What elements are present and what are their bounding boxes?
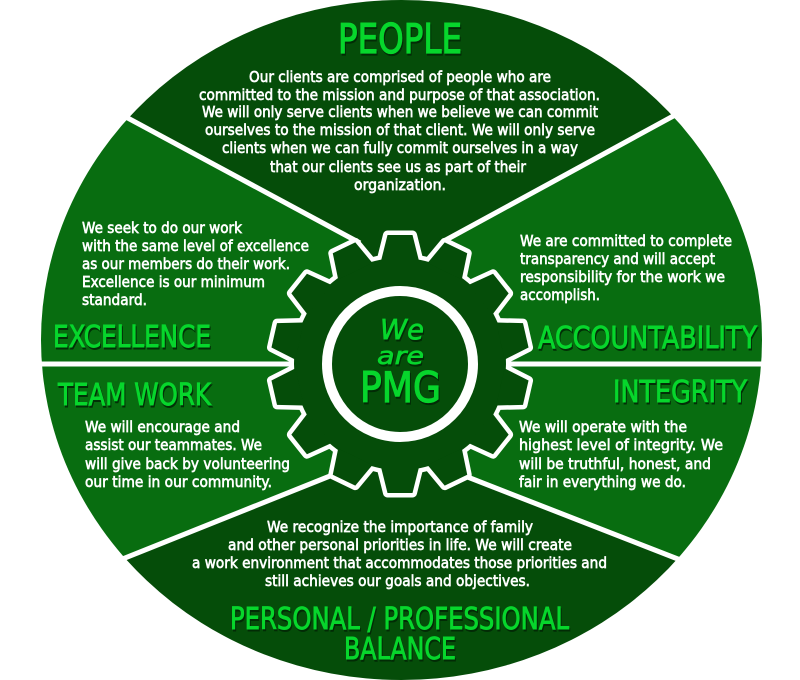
heading: people: PEOPLE: [338, 15, 462, 63]
text: balance: and other personal priorities in life. We will create: [228, 536, 572, 554]
text: people: clients when we can fully commit ourselves in a way: [222, 139, 578, 157]
heading: personal professional balance: [230, 602, 569, 667]
text: people: committed to the mission and purpose of that association.: [199, 86, 600, 104]
heading: team work: TEAM WORK: [57, 378, 212, 413]
text: integrity: fair in everything we do.: [519, 473, 686, 491]
text: integrity: will be truthful, honest, and: [519, 455, 711, 473]
text: team work: will give back by volunteering: [85, 455, 290, 473]
text: accountability: transparency and will accept: [520, 250, 715, 268]
text: people: Our clients are comprised of people who are: [249, 68, 551, 86]
text: excellence: [82, 219, 309, 309]
center label: We are PMG: PMG: [360, 363, 441, 412]
text: team work: We will encourage and: [85, 418, 240, 436]
text: integrity: We will operate with the: [519, 418, 687, 436]
text: people: that our clients see us as part of their: [270, 158, 527, 176]
heading: personal professional balance: BALANCE: [344, 632, 456, 667]
panel: personal professional balance: [126, 471, 676, 680]
text: excellence: Excellence is our minimum: [82, 273, 265, 291]
panel: people: [130, 0, 671, 257]
text: excellence: as our members do their work.: [82, 255, 290, 273]
text: team work: [85, 418, 290, 491]
heading: personal professional balance: PERSONAL / PROFESSIONAL: [230, 602, 569, 637]
text: team work: assist our teammates. We: [85, 436, 262, 454]
text: balance: We recognize the importance of family: [267, 518, 533, 536]
panel: integrity: [467, 366, 761, 557]
heading: excellence: EXCELLENCE: [53, 320, 211, 355]
heading: integrity: INTEGRITY: [613, 375, 748, 410]
icon: gear: [270, 235, 530, 493]
text: integrity: [519, 418, 723, 491]
text: accountability: [520, 232, 732, 304]
text: people: We will only serve clients when we believe we can commit: [202, 103, 598, 121]
text: balance: [192, 518, 607, 590]
dividers: [35, 114, 768, 561]
panel: team work: [42, 366, 333, 556]
panel: accountability: [450, 118, 762, 362]
center label: We are PMG: We: [380, 313, 424, 346]
text: people: organization.: [354, 176, 446, 194]
text: balance: still achieves our goals and objectives.: [265, 572, 530, 590]
text: integrity: highest level of integrity. We: [519, 436, 723, 454]
text: accountability: We are committed to complete: [520, 232, 732, 250]
text: excellence: We seek to do our work: [82, 219, 242, 237]
text: people: [199, 68, 600, 194]
text: team work: our time in our community.: [85, 473, 272, 491]
center label: We are PMG: [360, 313, 441, 412]
text: people: ourselves to the mission of that client. We will only serve: [205, 121, 595, 139]
center label: We are PMG: are: [377, 342, 424, 370]
text: accountability: accomplish.: [520, 286, 600, 304]
heading: accountability: ACCOUNTABILITY: [538, 321, 758, 356]
text: balance: a work environment that accommodates those priorities and: [192, 554, 607, 572]
text: accountability: responsibility for the work we: [520, 268, 725, 286]
panel: excellence: [41, 120, 350, 362]
text: excellence: standard.: [82, 291, 147, 309]
text: excellence: with the same level of excellence: [82, 237, 309, 255]
